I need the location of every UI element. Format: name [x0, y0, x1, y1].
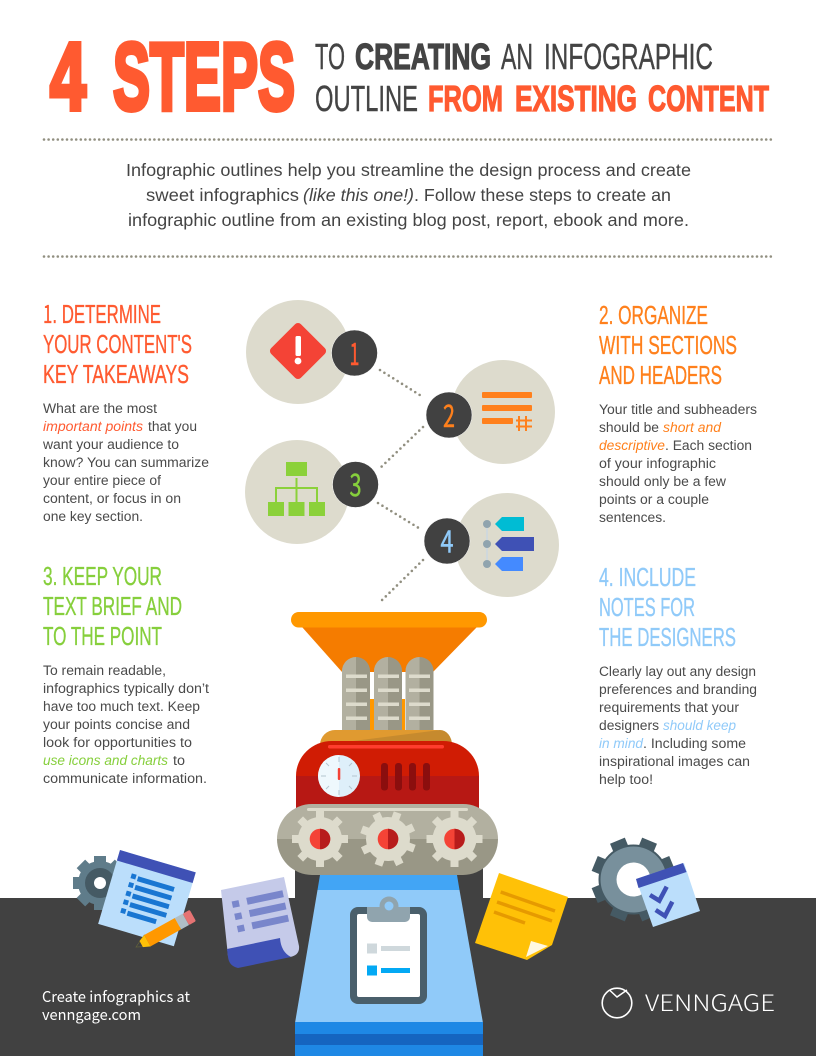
- gear 1: [292, 811, 348, 867]
- body: step 2: should only be a few: [599, 474, 726, 489]
- intro paragraph: [126, 160, 691, 230]
- title: subtitle: EXISTING: [515, 78, 637, 119]
- intro paragraph: (like this one!): [303, 185, 414, 205]
- body: step 1: want your audience to: [42, 437, 179, 452]
- gear 2: [352, 803, 424, 875]
- icon: tagged notes: [483, 517, 534, 571]
- body: step 4: should keep: [663, 718, 737, 733]
- body: step 4: in mind: [599, 736, 644, 751]
- title: subtitle: INFOGRAPHIC: [544, 36, 713, 77]
- body: step 2: should be: [599, 420, 659, 435]
- number badge 1: 1: [350, 329, 360, 374]
- body: step 3: To remain readable,: [43, 663, 166, 678]
- heading: step 2: 2. ORGANIZE: [599, 302, 708, 330]
- step circle 2: [426, 360, 555, 464]
- heading: step 1: KEY TAKEAWAYS: [43, 361, 189, 389]
- footer text: Create infographics at: [42, 986, 190, 1007]
- heading: step 2: AND HEADERS: [599, 362, 722, 390]
- gauge: [318, 755, 360, 797]
- step circle 4: [424, 493, 559, 597]
- icon: warning diamond: [268, 321, 328, 381]
- body: step 3: your points concise and: [43, 717, 190, 732]
- footer text: [42, 986, 190, 1025]
- footer text: venngage.com: [42, 1004, 141, 1025]
- vents: [381, 763, 430, 790]
- title: 4 steps: 4: [50, 24, 86, 130]
- panel: step 1 text: [42, 294, 209, 524]
- icon: sticky note: [475, 873, 568, 960]
- panel: step 2 text: [599, 302, 757, 525]
- body: step 3: have too much text. Keep: [43, 699, 200, 714]
- icon: clipboard: [350, 896, 427, 1004]
- machine: funnel: [291, 612, 487, 733]
- number badge 2: 2: [443, 391, 455, 436]
- heading: step 3: TO THE POINT: [43, 623, 162, 651]
- body: step 2: descriptive: [599, 438, 665, 453]
- body: step 1: know? You can summarize: [43, 455, 209, 470]
- body: step 1: What are the most: [43, 401, 157, 416]
- title: subtitle: TO: [315, 36, 345, 77]
- body: step 1: your entire piece of: [43, 473, 161, 488]
- gear 3: [426, 811, 482, 867]
- body: step 2: of your infographic: [599, 456, 716, 471]
- heading: step 2: WITH SECTIONS: [599, 332, 737, 360]
- icon: text lines with hash: [482, 392, 532, 431]
- intro paragraph: sweet infographics: [146, 185, 299, 205]
- heading: step 3: TEXT BRIEF AND: [43, 593, 182, 621]
- body: step 4: help too!: [599, 772, 653, 787]
- heading: step 3: 3. KEEP YOUR: [43, 563, 162, 591]
- body: step 4: requirements that your: [599, 700, 740, 715]
- heading: step 1: [43, 294, 192, 389]
- icon: org chart: [268, 462, 325, 516]
- icon: pencil: [133, 910, 196, 953]
- machine: tubes: [342, 657, 434, 731]
- heading: step 3: [43, 563, 182, 651]
- body: step 1: one key section.: [43, 509, 143, 524]
- title: subtitle: AN: [501, 36, 533, 77]
- body: step 3: use icons and charts: [43, 753, 168, 768]
- icon: large gear: [579, 825, 688, 934]
- icon: checklist card: [636, 863, 700, 927]
- machine: blue output chute: [295, 875, 483, 1056]
- body: step 2: sentences.: [599, 510, 666, 525]
- body: step 4: preferences and branding: [599, 682, 757, 697]
- body: step 3: to: [173, 753, 185, 768]
- heading: step 4: [599, 564, 736, 652]
- heading: step 1: YOUR CONTENT'S: [43, 331, 192, 359]
- body: step 3: look for opportunities to: [43, 735, 192, 750]
- panel: step 4 text: [599, 564, 757, 787]
- body: step 2: points or a couple: [599, 492, 709, 507]
- intro paragraph: Infographic outlines help you streamline the design process and create: [126, 160, 691, 180]
- dotted connectors: [378, 370, 423, 603]
- icon: small gear: [73, 856, 127, 910]
- heading: step 1: 1. DETERMINE: [43, 294, 161, 331]
- body: step 4: [599, 664, 757, 787]
- intro paragraph: infographic outline from an existing blog post, report, ebook and more.: [128, 210, 689, 230]
- number badge 4: 4: [440, 516, 454, 562]
- title: [50, 24, 769, 130]
- icon: document with list: [98, 850, 196, 946]
- body: step 4: designers: [599, 718, 659, 733]
- title: subtitle: FROM: [428, 78, 503, 119]
- title: 4 steps: [50, 24, 295, 130]
- body: step 1: [42, 401, 209, 524]
- body: step 1: important points: [43, 419, 143, 434]
- body: step 4: . Including some: [643, 736, 746, 751]
- icon: scroll: [221, 877, 299, 968]
- body: step 2: [599, 402, 757, 525]
- heading: step 2: [599, 302, 737, 390]
- step circle 3: [245, 440, 378, 544]
- body: step 3: infographics typically don’t: [43, 681, 209, 696]
- machine: toaster body: [296, 730, 479, 812]
- logo: venngage: VENNGAGE: [645, 986, 775, 1018]
- panel: step 3 text: [43, 563, 209, 786]
- heading: step 4: NOTES FOR: [599, 594, 695, 622]
- footer band: [0, 865, 816, 1056]
- title: subtitle: CREATING: [355, 36, 491, 77]
- number badge 3: 3: [350, 460, 362, 505]
- body: step 4: inspirational images can: [599, 754, 750, 769]
- heading: step 4: THE DESIGNERS: [599, 624, 736, 652]
- body: step 1: content, or focus in on: [43, 491, 181, 506]
- step circle 1: [246, 300, 378, 404]
- body: step 3: [43, 663, 209, 786]
- body: step 4: Clearly lay out any design: [599, 664, 756, 679]
- heading: step 4: 4. INCLUDE: [599, 564, 696, 592]
- title: subtitle: OUTLINE: [315, 78, 418, 119]
- title: 4 steps: STEPS: [113, 24, 295, 130]
- body: step 2: Your title and subheaders: [599, 402, 757, 417]
- machine: conveyor with gears: [277, 803, 498, 875]
- body: step 2: . Each section: [665, 438, 752, 453]
- body: step 1: that you: [148, 419, 197, 434]
- intro paragraph: . Follow these steps to create an: [414, 185, 671, 205]
- body: step 2: short and: [663, 420, 722, 435]
- body: step 3: communicate information.: [43, 771, 207, 786]
- logo: venngage: [602, 986, 775, 1018]
- title: subtitle: [315, 36, 769, 119]
